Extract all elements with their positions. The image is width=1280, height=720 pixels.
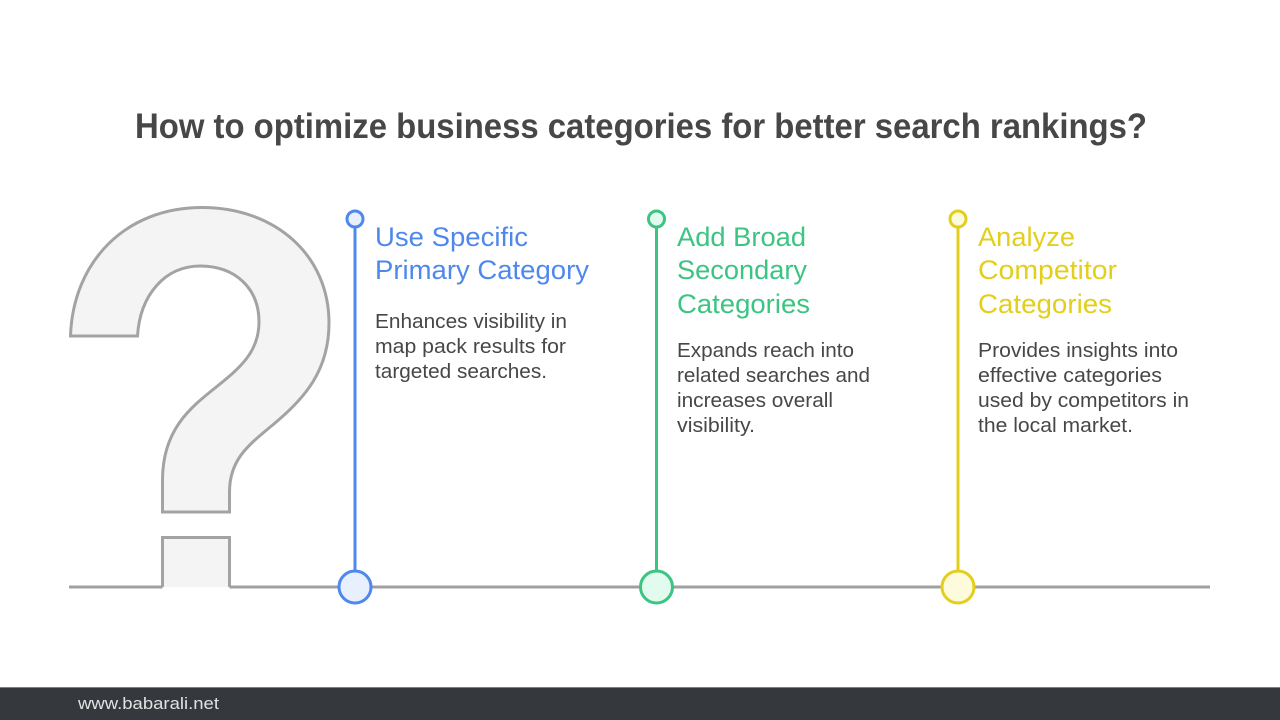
panel: add broad secondary categories: Secondary bbox=[677, 255, 807, 285]
panel: add broad secondary categories: Categories bbox=[677, 289, 810, 319]
panel: analyze competitor categories: Competitor bbox=[978, 255, 1117, 285]
icon: question mark bbox=[70, 208, 329, 587]
baseline axis bbox=[69, 586, 1210, 588]
panel: add broad secondary categories: increases overall bbox=[677, 390, 833, 412]
panel: analyze competitor categories: used by competitors in bbox=[978, 390, 1189, 412]
panel: add broad secondary categories: related searches and bbox=[677, 365, 870, 387]
footer bar: www.babarali.net bbox=[77, 694, 219, 713]
panel: add broad secondary categories: Add Broad bbox=[677, 222, 806, 252]
panel: analyze competitor categories: Provides insights into bbox=[978, 340, 1178, 362]
footer bar bbox=[0, 687, 1280, 720]
panel: analyze competitor categories: Analyze bbox=[978, 222, 1075, 252]
title: How to optimize business categories for better search rankings? bbox=[135, 107, 1147, 146]
panel: use specific primary category: map pack results for bbox=[375, 336, 566, 358]
panel: use specific primary category: Primary Category bbox=[375, 255, 590, 285]
panel: analyze competitor categories: Categories bbox=[978, 289, 1112, 319]
panel: use specific primary category: Enhances visibility in bbox=[375, 311, 567, 333]
panel: use specific primary category: targeted searches. bbox=[375, 361, 547, 383]
panel: analyze competitor categories: the local market. bbox=[978, 415, 1133, 437]
panel: use specific primary category: Use Specific bbox=[375, 222, 528, 252]
panel: add broad secondary categories: visibility. bbox=[677, 415, 755, 437]
panel: add broad secondary categories bbox=[640, 211, 870, 603]
panel: analyze competitor categories: effective categories bbox=[978, 365, 1162, 387]
panel: use specific primary category bbox=[339, 211, 590, 603]
panel: analyze competitor categories bbox=[942, 211, 1189, 603]
panel: add broad secondary categories: Expands reach into bbox=[677, 340, 854, 362]
